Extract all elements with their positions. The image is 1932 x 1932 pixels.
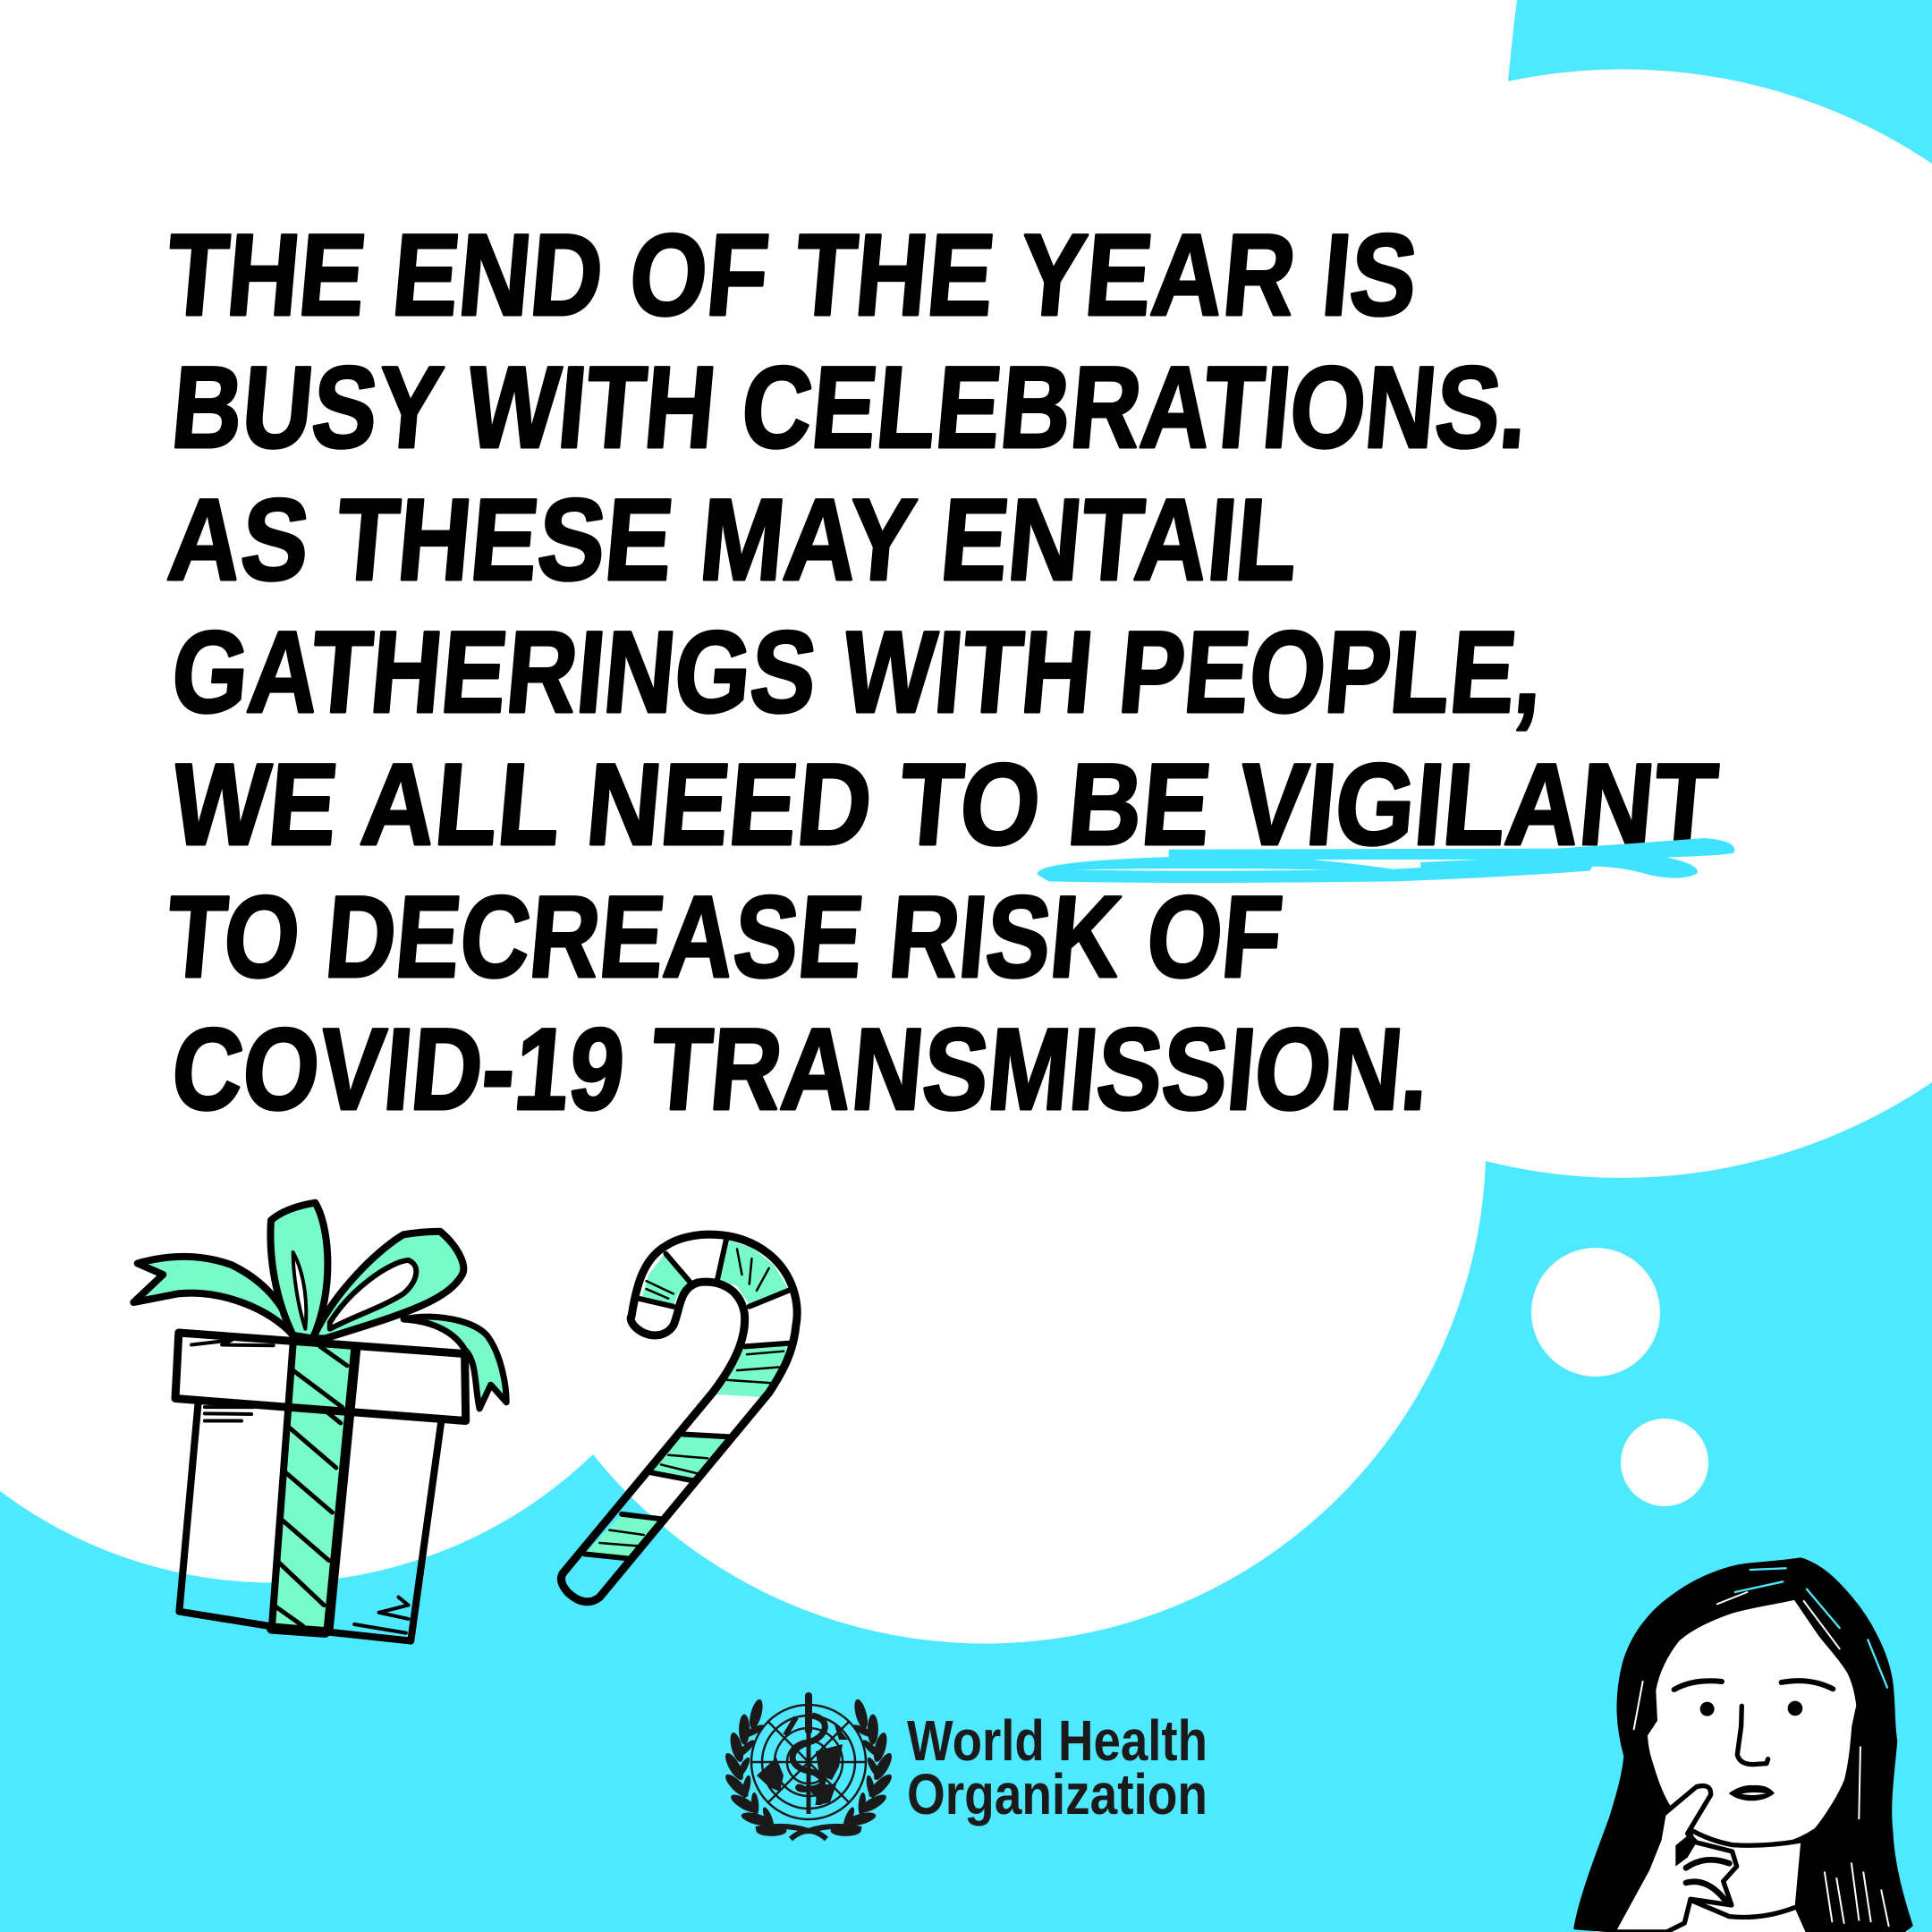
icon: gift box: [133, 1203, 506, 1641]
icon: candy cane: [561, 1234, 797, 1602]
who wordmark: World Health: [907, 1708, 1208, 1773]
hair highlights: [1735, 1568, 1887, 1688]
hair: [1575, 1559, 1911, 1932]
main message text: AS THESE MAY ENTAIL: [164, 474, 1303, 605]
main message text: THE END OF THE YEAR IS: [162, 209, 1422, 340]
bow: right loop: [313, 1232, 463, 1338]
mint stripes: [585, 1240, 789, 1559]
illustration: thinking woman: [1575, 1559, 1911, 1932]
eyebrows: [1674, 1681, 1833, 1690]
who logo: [722, 1696, 1208, 1839]
thought bubble: small: [1621, 1419, 1708, 1506]
ribbon band: [272, 1343, 354, 1629]
main message text: WE ALL NEED TO BE VIGILANT: [167, 739, 1722, 869]
main message text: BUSY WITH CELEBRATIONS.: [167, 342, 1533, 472]
box body: [179, 1401, 441, 1641]
box lid: [175, 1333, 466, 1421]
hand and finger: [1613, 1786, 1737, 1932]
cyan brush underline: [1039, 840, 1733, 881]
who wordmark: Organization: [907, 1762, 1208, 1826]
main message text: [162, 209, 1722, 1134]
eyes: [1700, 1701, 1802, 1716]
who wordmark: [907, 1708, 1208, 1826]
stripe edges: [585, 1240, 789, 1559]
face: [1647, 1598, 1858, 1845]
sketch marks: [191, 1340, 409, 1633]
main message text: COVID-19 TRANSMISSION.: [167, 1004, 1435, 1134]
bow: top loop slit: [293, 1252, 306, 1329]
main message text: GATHERINGS WITH PEOPLE,: [167, 606, 1548, 737]
who emblem: staff and serpent: [785, 1696, 825, 1814]
who emblem: laurel wreath: [722, 1698, 895, 1839]
nose: [1737, 1706, 1768, 1765]
outline: [561, 1234, 797, 1602]
bow: right loop opening: [330, 1260, 416, 1329]
stripe hatching: [599, 1249, 784, 1546]
neck: [1690, 1834, 1801, 1917]
shoulders: [1595, 1878, 1908, 1932]
ribbon edges and stripes: [272, 1343, 356, 1632]
thought bubble: large: [1531, 1248, 1660, 1377]
collar and jaw lines: [1692, 1831, 1800, 1918]
who emblem: globe: [751, 1705, 866, 1819]
main message text: TO DECREASE RISK OF: [162, 871, 1287, 1002]
bow: right tail: [403, 1317, 506, 1409]
mouth: [1729, 1785, 1775, 1801]
finger shading: [1675, 1832, 1697, 1867]
bow: left tail: [133, 1257, 293, 1335]
bow: top loop: [270, 1203, 327, 1338]
